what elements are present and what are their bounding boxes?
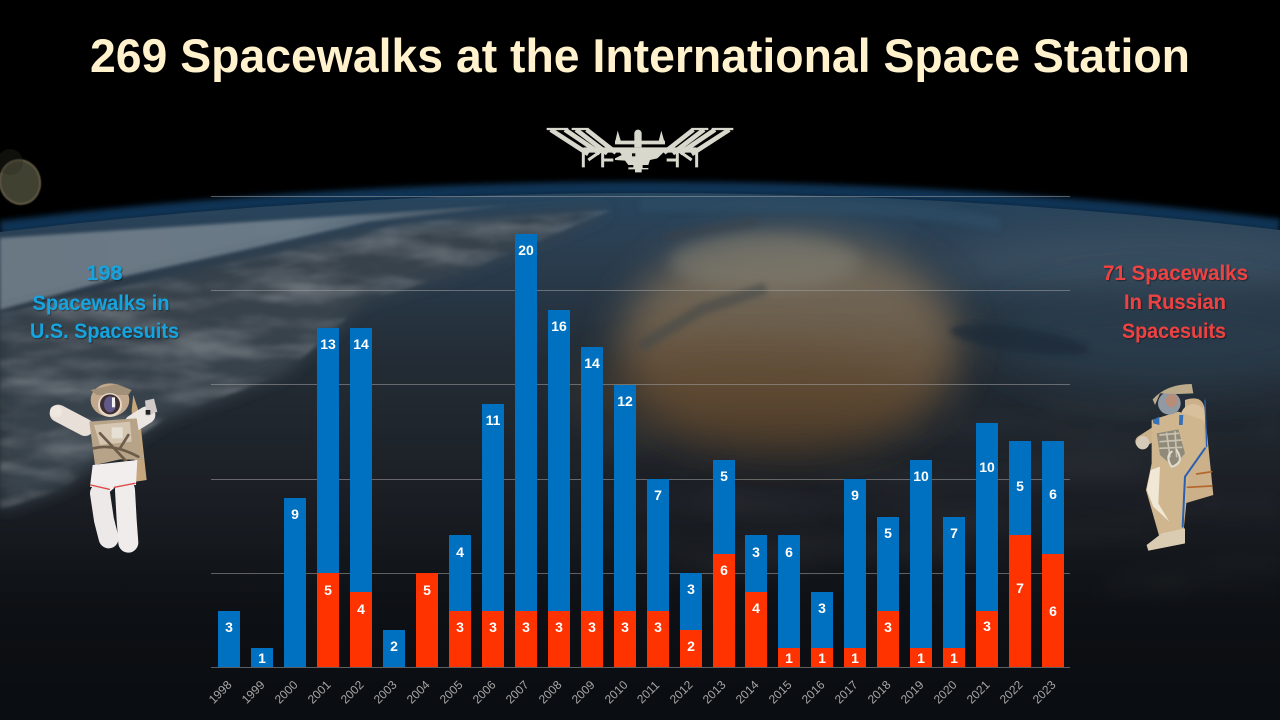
bar value labels: 3 (555, 619, 563, 635)
x-axis year labels: 2004 (404, 678, 433, 707)
bar value labels: 9 (291, 506, 299, 522)
bar value labels: 3 (884, 619, 892, 635)
x-axis year labels: 2012 (667, 678, 696, 707)
bar value labels: 1 (785, 650, 793, 666)
bar value labels: 5 (884, 525, 892, 541)
x-axis year labels: 2002 (338, 678, 367, 707)
x-axis year labels: 1999 (239, 678, 268, 707)
icon: International Space Station (547, 129, 733, 172)
bar value labels: 7 (654, 487, 662, 503)
title: 269 Spacewalks at the International Space Station (90, 29, 1190, 82)
bar chart: spacewalks per year (206, 196, 1070, 707)
x-axis year labels: 2019 (898, 678, 927, 707)
bar value labels: 2 (390, 638, 398, 654)
bar value labels: 12 (617, 393, 633, 409)
bar value labels: 7 (1016, 580, 1024, 596)
x-axis year labels: 2006 (470, 678, 499, 707)
bar value labels: 3 (225, 619, 233, 635)
x-axis year labels: 2017 (832, 678, 861, 707)
x-axis year labels: 2020 (931, 678, 960, 707)
bar value labels: 9 (851, 487, 859, 503)
bar value labels: 3 (489, 619, 497, 635)
bar value labels: 10 (913, 468, 929, 484)
x-axis year labels: 2018 (865, 678, 894, 707)
bar value labels: 4 (456, 544, 464, 560)
x-axis year labels: 2005 (437, 678, 466, 707)
x-axis year labels: 2010 (602, 678, 631, 707)
bar value labels: 3 (621, 619, 629, 635)
bar value labels: 7 (950, 525, 958, 541)
side label: U.S. spacesuits (30, 262, 179, 343)
x-axis year labels: 2013 (700, 678, 729, 707)
icon: astronaut in Russian spacesuit (1136, 384, 1213, 551)
bar value labels: 4 (357, 601, 365, 617)
bar value labels: 14 (584, 355, 600, 371)
bar value labels: 6 (785, 544, 793, 560)
background: space and Earth (0, 178, 1280, 720)
icon: astronaut in U.S. spacesuit (50, 383, 157, 543)
x-axis year labels: 2001 (305, 678, 334, 707)
x-axis year labels: 2000 (272, 678, 301, 707)
bar value labels: 3 (818, 600, 826, 616)
x-axis year labels: 2008 (536, 678, 565, 707)
x-axis year labels: 2009 (569, 678, 598, 707)
x-axis year labels: 2016 (799, 678, 828, 707)
x-axis year labels: 2014 (733, 678, 762, 707)
chart gridlines (211, 196, 1070, 668)
bar value labels: 3 (588, 619, 596, 635)
bar value labels: 1 (258, 650, 266, 666)
bar value labels: 3 (983, 618, 991, 634)
x-axis year labels: 2003 (371, 678, 400, 707)
bar value labels: 14 (353, 336, 369, 352)
x-axis year labels: 1998 (206, 678, 235, 707)
red bars: Russian spacesuits (317, 535, 1064, 667)
bar value labels: 5 (423, 582, 431, 598)
bar value labels: 13 (320, 336, 336, 352)
bar value labels: 6 (1049, 486, 1057, 502)
x-axis year labels: 2007 (503, 678, 532, 707)
x-axis year labels (206, 678, 1059, 707)
x-axis year labels: 2023 (1030, 678, 1059, 707)
x-axis year labels: 2022 (997, 678, 1026, 707)
side label: Russian spacesuits (1103, 262, 1248, 343)
bar value labels: 3 (456, 619, 464, 635)
bar value labels: 1 (950, 650, 958, 666)
bar value labels: 10 (979, 459, 995, 475)
bar value labels: 6 (1049, 603, 1057, 619)
side label: Russian spacesuits: In Russian (1124, 291, 1226, 314)
side label: U.S. spacesuits: Spacewalks in (32, 292, 170, 315)
bar value labels: 3 (687, 581, 695, 597)
bar value labels: 1 (818, 650, 826, 666)
lens flare (0, 149, 45, 208)
bar value labels: 5 (1016, 478, 1024, 494)
bar value labels: 3 (654, 619, 662, 635)
side label: U.S. spacesuits: U.S. Spacesuits (30, 320, 179, 343)
x-axis year labels: 2015 (766, 678, 795, 707)
side label: U.S. spacesuits: 198 (86, 262, 123, 285)
bar value labels: 2 (687, 638, 695, 654)
bar value labels: 5 (324, 582, 332, 598)
bar value labels: 20 (518, 242, 534, 258)
side label: Russian spacesuits: 71 Spacewalks (1103, 262, 1248, 285)
bar value labels: 3 (752, 544, 760, 560)
blue bars: U.S. spacesuits (218, 234, 1064, 667)
bar value labels: 1 (851, 650, 859, 666)
bar value labels: 16 (551, 318, 567, 334)
side label: Russian spacesuits: Spacesuits (1122, 320, 1226, 343)
bar value labels: 3 (522, 619, 530, 635)
bar value labels: 11 (486, 412, 501, 428)
bar value labels: 5 (720, 468, 728, 484)
bar value labels: 6 (720, 562, 728, 578)
bar value labels: 4 (752, 600, 760, 616)
x-axis year labels: 2021 (964, 678, 993, 707)
bar value labels: 1 (917, 650, 925, 666)
bar value labels (225, 242, 1057, 666)
x-axis year labels: 2011 (634, 678, 662, 706)
